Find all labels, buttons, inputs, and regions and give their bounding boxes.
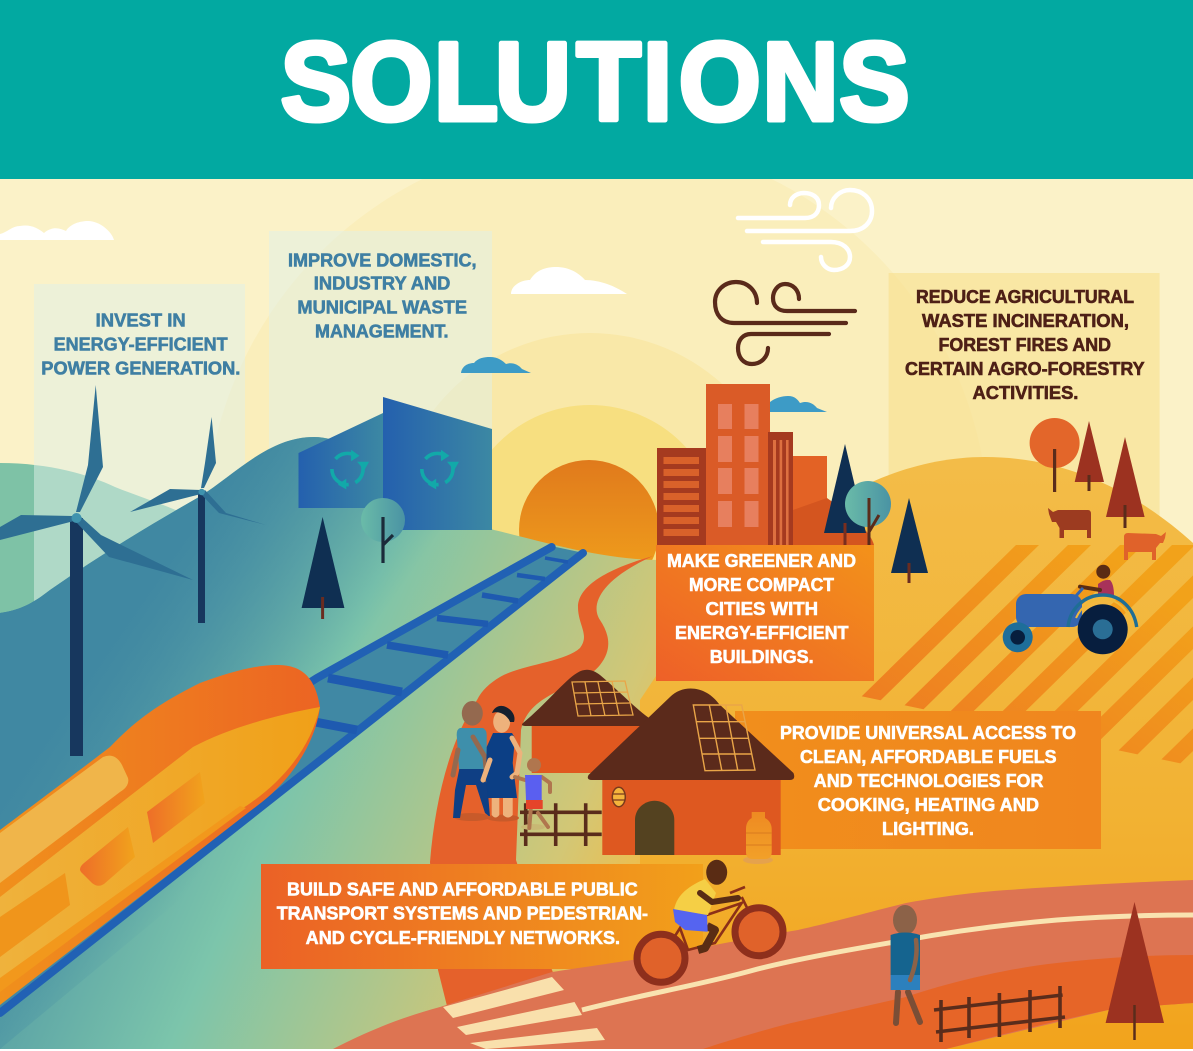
text: agriculture: ACTIVITIES. <box>972 383 1078 403</box>
solar panel back <box>572 681 633 716</box>
train lower body <box>0 707 320 987</box>
text: cities: MORE COMPACT <box>689 575 834 595</box>
icon: recycling right <box>422 450 459 489</box>
left wing <box>298 413 383 508</box>
panel: waste backdrop <box>269 231 492 531</box>
city skyline <box>657 384 874 545</box>
tree: pine right of city <box>891 498 928 583</box>
winding orange road <box>430 556 653 1010</box>
railway track <box>0 546 584 1013</box>
person: child <box>515 758 550 830</box>
icon: white wind <box>738 190 872 270</box>
high-speed train <box>0 665 320 1005</box>
text: cities: MAKE GREENER AND <box>667 551 856 571</box>
back green hill <box>0 463 240 640</box>
building: narrow dark <box>768 432 793 545</box>
callout box: transport <box>261 864 703 969</box>
wind turbine: small <box>130 417 266 623</box>
text: waste: IMPROVE DOMESTIC, <box>288 250 476 270</box>
tree: farm pine small <box>1075 421 1104 491</box>
text: power generation <box>41 311 240 379</box>
person: woman <box>483 706 520 822</box>
ground with teal to gold gradient <box>0 437 800 1049</box>
text: agriculture: WASTE INCINERATION, <box>922 311 1129 331</box>
text: waste: MANAGEMENT. <box>315 322 448 342</box>
text: waste <box>288 250 476 342</box>
text: cities: CITIES WITH <box>706 599 818 619</box>
tree: pine near plant <box>302 517 344 619</box>
text: agriculture: FOREST FIRES AND <box>938 335 1111 355</box>
text: transport: TRANSPORT SYSTEMS AND PEDESTRIAN- <box>277 904 648 924</box>
tractor front wheel <box>1003 622 1033 652</box>
callout box: fuels <box>735 711 1101 849</box>
tractor fender <box>1068 595 1137 627</box>
person: man <box>453 701 490 821</box>
title band <box>0 0 1193 179</box>
callout box: city <box>656 545 874 681</box>
text: power generation: INVEST IN <box>96 311 186 331</box>
text: agriculture: CERTAIN AGRO-FORESTRY <box>905 359 1145 379</box>
tree: city pine <box>824 444 866 546</box>
bicycle front wheel <box>735 908 783 956</box>
family <box>453 701 550 830</box>
bicycle frame <box>662 887 758 957</box>
text: cities <box>667 551 856 667</box>
hill shading: teal upper slope <box>0 437 500 1049</box>
road centre line <box>582 915 1193 1010</box>
train windows <box>147 772 205 843</box>
dark orange road band <box>703 955 1193 1049</box>
tractor <box>1003 565 1137 654</box>
zebra crossing <box>443 977 605 1049</box>
window <box>612 787 625 807</box>
text: transport: BUILD SAFE AND AFFORDABLE PUBLIC <box>287 880 638 900</box>
tree: orange round on farm <box>1030 418 1080 492</box>
person: walker <box>891 905 920 1023</box>
front house <box>588 688 794 855</box>
text: agriculture <box>905 287 1145 403</box>
text: fuels: PROVIDE UNIVERSAL ACCESS TO <box>780 723 1076 743</box>
rider <box>698 926 715 950</box>
icon: recycling left <box>332 450 369 489</box>
gas cylinder <box>743 812 773 864</box>
tractor driver <box>1096 565 1110 579</box>
text: fuels: COOKING, HEATING AND <box>818 795 1039 815</box>
train long window <box>0 756 128 883</box>
solar panel front <box>693 705 755 771</box>
text: transport <box>277 880 648 948</box>
tree: farm pine large <box>1106 437 1145 528</box>
text: cities: BUILDINGS. <box>710 647 814 667</box>
text: fuels: CLEAN, AFFORDABLE FUELS <box>800 747 1056 767</box>
sun <box>519 460 659 600</box>
tractor rear wheel <box>1078 604 1128 654</box>
fence: lower right <box>934 986 1065 1042</box>
building: low right <box>793 456 827 545</box>
wind turbine: large <box>0 385 193 756</box>
text: transport: AND CYCLE-FRIENDLY NETWORKS. <box>306 928 620 948</box>
cloud: white centre <box>511 267 627 294</box>
text: waste: MUNICIPAL WASTE <box>297 298 467 318</box>
cloud: blue left <box>461 357 531 373</box>
bicycle rear wheel <box>637 934 685 982</box>
text: agriculture: REDUCE AGRICULTURAL <box>916 287 1134 307</box>
text: waste: INDUSTRY AND <box>314 274 450 294</box>
cyclist <box>637 860 783 982</box>
cow: dark <box>1048 508 1091 538</box>
panel: power generation backdrop <box>34 284 245 614</box>
text: power generation: POWER GENERATION. <box>41 359 240 379</box>
back house <box>522 670 649 773</box>
tree: large bottom right pine <box>1106 902 1164 1040</box>
cloud: blue city <box>770 396 827 412</box>
tree: teal near plant <box>361 498 405 563</box>
icon: brown wind <box>715 282 855 364</box>
text: fuels: AND TECHNOLOGIES FOR <box>814 771 1043 791</box>
pink cycle road <box>333 880 1193 1049</box>
fence by family <box>520 803 602 846</box>
tractor body <box>1016 594 1082 627</box>
building: recycling plant <box>298 397 492 530</box>
building: tall tower <box>706 384 770 545</box>
text: fuels <box>780 723 1076 839</box>
farm field stripes <box>862 545 1193 764</box>
cow: orange <box>1124 532 1166 560</box>
tree: city round teal <box>845 481 891 546</box>
title: SOLUTIONS <box>281 20 910 144</box>
train body <box>0 665 320 1005</box>
sunrise rings <box>245 179 892 560</box>
building: brick left <box>657 448 706 545</box>
door <box>635 801 674 855</box>
cloud: white left <box>0 221 114 240</box>
farm hill <box>640 457 1193 1049</box>
train stripe <box>0 806 246 992</box>
text: cities: ENERGY-EFFICIENT <box>675 623 849 643</box>
right wing <box>383 397 492 530</box>
text: fuels: LIGHTING. <box>882 819 974 839</box>
text: power generation: ENERGY-EFFICIENT <box>54 335 228 355</box>
panel: agriculture backdrop <box>889 273 1160 553</box>
